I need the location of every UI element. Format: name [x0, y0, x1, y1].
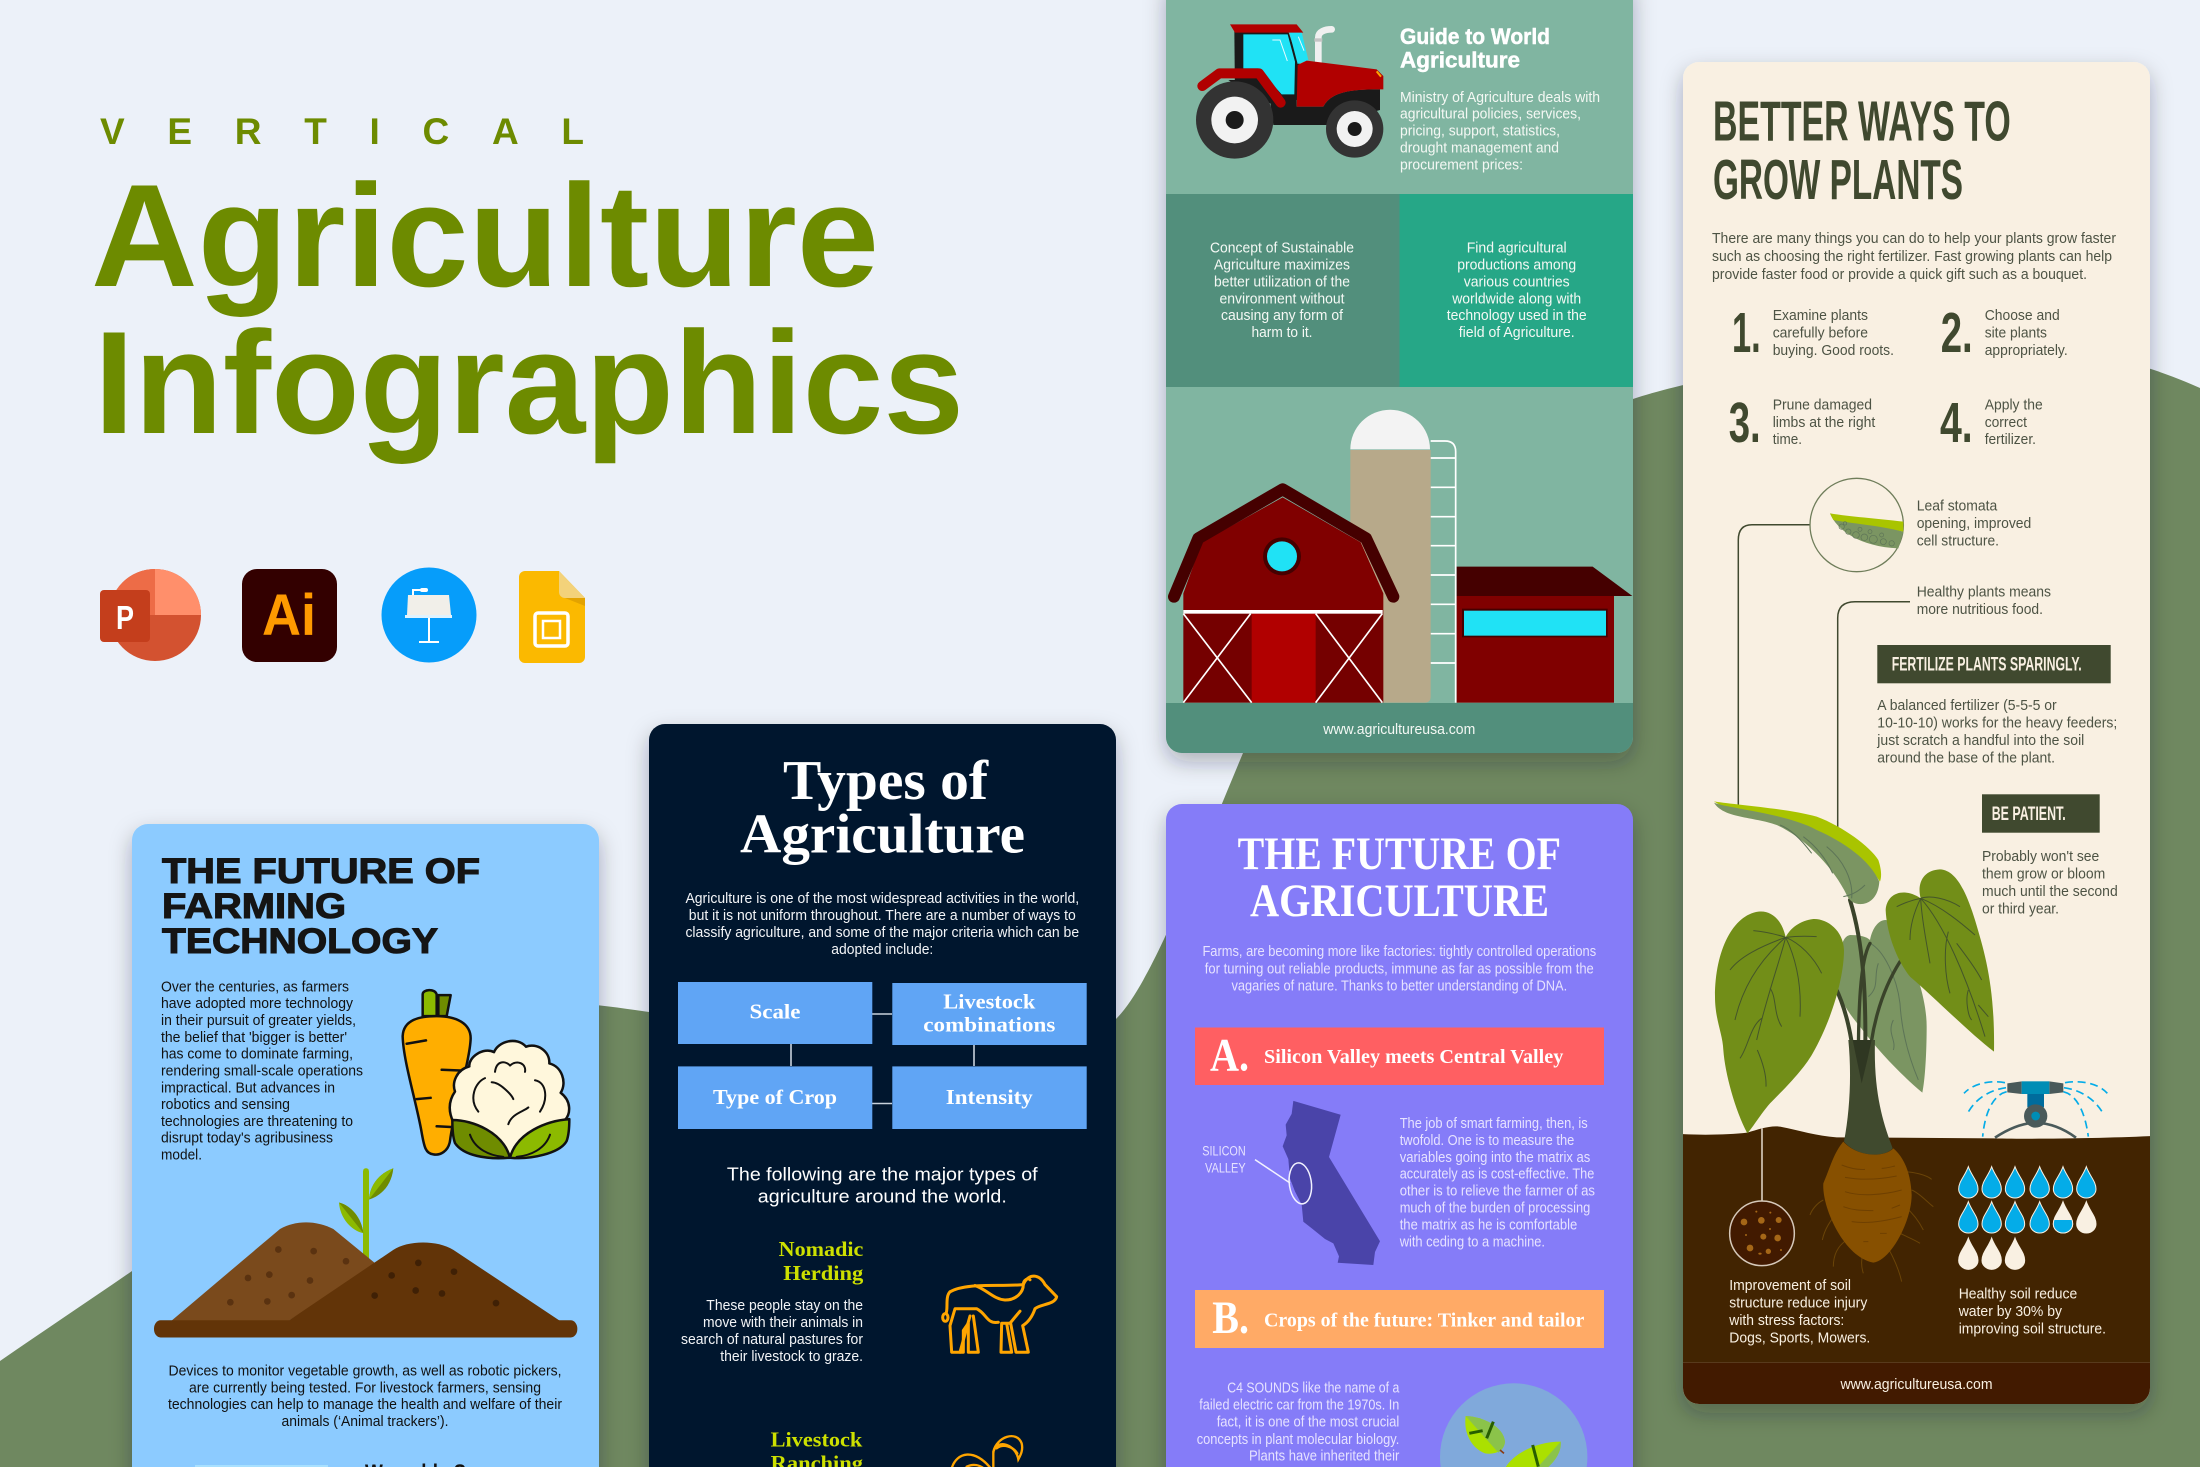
tip 3: time. — [1773, 431, 1802, 448]
intro text — [161, 979, 363, 1164]
heading: Agriculture — [740, 803, 1025, 865]
image placeholder top edge — [195, 1465, 328, 1467]
section B text: C4 SOUNDS like the name of a — [1227, 1381, 1400, 1397]
heading — [740, 750, 1025, 865]
icon: illustrator — [242, 569, 337, 662]
type: nomadic herding: search of natural pastures for — [681, 1332, 863, 1348]
criteria diagram: Livestock — [943, 989, 1036, 1013]
heading: TECHNOLOGY — [162, 922, 438, 961]
block: sustainable agriculture: Agriculture maximizes — [1214, 257, 1350, 273]
panel: better ways to grow plants — [1680, 62, 2153, 1406]
block: sustainable agriculture: Concept of Sustainable — [1210, 240, 1354, 256]
intro text: Ministry of Agriculture deals with — [1400, 90, 1600, 106]
soil note: structure reduce injury — [1729, 1294, 1868, 1311]
fertilizer text: 10-10-10) works for the heavy feeders; — [1877, 714, 2117, 731]
intro text: in their pursuit of greater yields, — [161, 1013, 356, 1029]
intro text: have adopted more technology — [161, 996, 354, 1012]
section A text: other is to relieve the farmer of as — [1400, 1183, 1595, 1199]
lower text: animals (‘Animal trackers’). — [282, 1414, 448, 1430]
tip 4: correct — [1985, 414, 2028, 431]
heading — [1238, 828, 1561, 927]
tip 2 — [1941, 301, 2068, 365]
intro text: robotics and sensing — [161, 1097, 290, 1113]
tip 1: Examine plants — [1773, 307, 1868, 324]
patience text: much until the second — [1982, 883, 2118, 900]
card background — [132, 824, 599, 1467]
section header B — [1195, 1290, 1604, 1348]
heading: agriculture infographics — [91, 154, 964, 464]
card background — [1166, 804, 1633, 1467]
soil note: with stress factors: — [1728, 1312, 1844, 1329]
block: agricultural productions: productions among — [1457, 257, 1576, 273]
section A text: twofold. One is to measure the — [1400, 1133, 1574, 1149]
subheading: agriculture around the world. — [758, 1186, 1007, 1206]
intro text: has come to dominate farming, — [161, 1047, 353, 1063]
intro text: drought management and — [1400, 141, 1559, 157]
tip 2: site plants — [1985, 324, 2047, 341]
section A text: much of the burden of processing — [1400, 1201, 1590, 1217]
intro text: agricultural policies, services, — [1400, 106, 1581, 122]
intro text: impractical. But advances in — [161, 1080, 335, 1096]
section B text: fact, it is one of the most crucial — [1217, 1415, 1399, 1431]
type: nomadic herding: These people stay on the — [706, 1298, 863, 1314]
water note: Healthy soil reduce — [1959, 1286, 2077, 1303]
section A text: The job of smart farming, then, is — [1400, 1116, 1588, 1132]
fertilizer text — [1876, 697, 2117, 767]
tip 4: Apply the — [1985, 396, 2043, 413]
tip 1 — [1732, 301, 1894, 365]
leaf stomata note: Leaf stomata — [1917, 498, 1998, 515]
soil note: Dogs, Sports, Mowers. — [1729, 1329, 1870, 1346]
soil note: Improvement of soil — [1729, 1277, 1851, 1294]
illustration: leaf detail circle — [1810, 478, 1903, 572]
software icons row — [100, 568, 585, 663]
icon: google slides — [519, 571, 585, 663]
icon: powerpoint — [100, 569, 201, 661]
heading: agriculture infographics: Infographics — [94, 301, 964, 464]
illustration: barn and silo — [1174, 410, 1632, 703]
patience text: them grow or bloom — [1982, 865, 2105, 882]
water note: improving soil structure. — [1959, 1321, 2106, 1338]
intro text: for turning out reliable products, immune as far as possible from the — [1205, 962, 1594, 978]
type: livestock ranching — [771, 1428, 864, 1467]
illustration: sprinkler — [1964, 1081, 2107, 1138]
water note: water by 30% by — [1958, 1303, 2062, 1320]
section header A: Silicon Valley meets Central Valley — [1264, 1046, 1564, 1068]
block: agricultural productions: worldwide along with — [1451, 291, 1581, 307]
criteria diagram: Scale — [750, 1000, 800, 1024]
type: nomadic herding — [681, 1237, 864, 1365]
tip 4: 4. — [1940, 391, 1973, 455]
section A text — [1399, 1116, 1595, 1250]
subheading — [727, 1164, 1039, 1206]
illustration: carrot and cauliflower — [403, 990, 569, 1158]
intro text: adopted include: — [831, 942, 933, 958]
intro text: rendering small-scale operations — [161, 1063, 363, 1079]
intro text: There are many things you can do to help your plants grow faster — [1712, 230, 2116, 247]
patience text: or third year. — [1982, 901, 2059, 918]
map: california silicon valley — [1202, 1101, 1380, 1265]
soil ground — [1680, 1126, 2153, 1406]
block: sustainable agriculture: environment without — [1220, 291, 1344, 307]
block: agricultural productions: field of Agriculture. — [1459, 325, 1575, 341]
fertilizer text: A balanced fertilizer (5-5-5 or — [1877, 697, 2057, 714]
tip 1: 1. — [1732, 301, 1761, 365]
icon: powerpoint: P — [116, 599, 134, 636]
heading — [1713, 90, 2011, 212]
heading: Types of — [783, 750, 989, 812]
heading: FARMING — [162, 887, 346, 926]
block: agricultural productions: technology used in the — [1447, 308, 1587, 324]
water drops chart — [1959, 1167, 2096, 1269]
patience text — [1982, 848, 2118, 918]
title block — [91, 111, 964, 464]
label: fertilize plants sparingly: FERTILIZE PLANTS SPARINGLY. — [1892, 654, 2082, 676]
healthy plants note: more nutritious food. — [1917, 601, 2043, 618]
intro text: provide faster food or provide a quick gift such as a bouquet. — [1712, 266, 2087, 283]
heading: BETTER WAYS TO — [1713, 90, 2011, 154]
type: nomadic herding: their livestock to graze. — [720, 1349, 863, 1365]
lower text: Devices to monitor vegetable growth, as well as robotic pickers, — [168, 1364, 562, 1380]
type: nomadic herding: Herding — [783, 1261, 864, 1285]
intro text — [1712, 230, 2116, 283]
label: be patient — [1982, 794, 2100, 833]
green hill background shape — [0, 349, 2200, 1467]
card background — [1683, 62, 2150, 1404]
intro text: disrupt today's agribusiness — [161, 1131, 333, 1147]
block: sustainable agriculture: causing any form of — [1221, 308, 1344, 324]
section B text: Plants have inherited their — [1249, 1449, 1399, 1465]
leaf stomata note — [1917, 498, 2031, 550]
panel: types of agriculture — [649, 724, 1116, 1467]
tip 3: 3. — [1729, 391, 1761, 455]
healthy plants note — [1917, 584, 2051, 618]
illustration: plant leaves — [1714, 801, 1994, 1133]
healthy plants note: Healthy plants means — [1917, 584, 2051, 601]
section A text: variables going into the matrix as — [1400, 1150, 1590, 1166]
heading: THE FUTURE OF — [162, 852, 480, 891]
tip 2: appropriately. — [1985, 342, 2068, 359]
tip 1: buying. Good roots. — [1773, 342, 1894, 359]
lower text — [168, 1364, 562, 1430]
tip 3: Prune damaged — [1773, 396, 1872, 413]
heading: agriculture infographics: Agriculture — [91, 154, 879, 317]
tip 1: carefully before — [1773, 324, 1868, 341]
intro text: model. — [161, 1148, 202, 1164]
intro text: Farms, are becoming more like factories: tightly controlled operations — [1202, 944, 1596, 960]
intro text — [685, 891, 1079, 958]
heading: GROW PLANTS — [1713, 148, 1963, 212]
overline: vertical: VERTICAL — [100, 111, 584, 152]
intro text: Over the centuries, as farmers — [161, 979, 349, 995]
card background — [649, 724, 1116, 1467]
icon: illustrator: Ai — [262, 583, 316, 648]
type: nomadic herding: Nomadic — [779, 1237, 863, 1261]
intro text: but it is not uniform throughout. There are a number of ways to — [689, 908, 1076, 924]
criteria diagram: Type of Crop — [713, 1085, 837, 1109]
criteria diagram — [678, 982, 1087, 1129]
patience text: Probably won't see — [1982, 848, 2099, 865]
callout lines — [1738, 525, 1910, 841]
section A text: with ceding to a machine. — [1399, 1234, 1545, 1250]
card background — [1166, 0, 1633, 753]
water note — [1958, 1286, 2106, 1338]
tip 2: 2. — [1941, 301, 1973, 365]
footer bar — [1166, 703, 1633, 753]
section header A: A. — [1210, 1030, 1249, 1082]
section header B: B. — [1212, 1292, 1249, 1344]
heading: AGRICULTURE — [1250, 875, 1549, 927]
panel: future of agriculture — [1166, 804, 1633, 1467]
section A text: the matrix as he is comfortable — [1400, 1218, 1577, 1234]
type: livestock ranching: Livestock — [771, 1428, 863, 1452]
lower text: technologies can help to manage the health and welfare of their — [168, 1397, 562, 1413]
map: california silicon valley: SILICON — [1202, 1143, 1246, 1158]
block: sustainable agriculture: better utilization of the — [1214, 274, 1350, 290]
icon: rooster — [952, 1436, 1022, 1467]
lower text: are currently being tested. For livestock farmers, sensing — [189, 1380, 541, 1396]
intro text: such as choosing the right fertilizer. Fast growing plants can help — [1712, 248, 2112, 265]
leaf stomata note: cell structure. — [1917, 533, 1999, 550]
section B text: failed electric car from the 1970s. In — [1199, 1397, 1399, 1413]
section B text — [1197, 1381, 1400, 1465]
section A text: accurately as is cost-effective. The — [1400, 1167, 1594, 1183]
block: agricultural productions — [1400, 194, 1633, 387]
tip 2: Choose and — [1985, 307, 2060, 324]
heading: THE FUTURE OF — [1238, 828, 1561, 880]
criteria diagram: Intensity — [946, 1085, 1033, 1109]
tip 4: fertilizer. — [1985, 431, 2036, 448]
intro text: procurement prices: — [1400, 157, 1523, 173]
section B text: concepts in plant molecular biology. — [1197, 1432, 1399, 1448]
panel: future of farming technology — [132, 824, 599, 1467]
heading — [1400, 24, 1550, 73]
illustration: soil sample circle — [1730, 1128, 1794, 1266]
block: agricultural productions: various countries — [1464, 274, 1570, 290]
section header B: Crops of the future: Tinker and tailor — [1264, 1310, 1584, 1332]
intro text: technologies are threatening to — [161, 1114, 353, 1130]
intro text: classify agriculture, and some of the major criteria which can be — [685, 925, 1079, 941]
footer url: www.agricultureusa.com — [1840, 1376, 1992, 1393]
heading: Guide to World — [1400, 24, 1550, 49]
section header A — [1195, 1028, 1604, 1085]
block: sustainable agriculture — [1166, 194, 1400, 387]
tip 4 — [1940, 391, 2043, 455]
intro text: vagaries of nature. Thanks to better understanding of DNA. — [1231, 978, 1567, 994]
leaf stomata note: opening, improved — [1917, 515, 2031, 532]
intro text — [1202, 944, 1596, 994]
type: nomadic herding: move with their animals in — [703, 1315, 863, 1331]
icon: keynote — [382, 568, 476, 662]
heading: Agriculture — [1400, 48, 1520, 73]
block: sustainable agriculture: harm to it. — [1252, 325, 1312, 341]
map: california silicon valley: VALLEY — [1205, 1161, 1246, 1176]
label: be patient: BE PATIENT. — [1992, 803, 2066, 825]
block: agricultural productions: Find agricultural — [1467, 240, 1567, 256]
illustration: soil mounds with sprout — [154, 1168, 577, 1337]
footer bar: www.agricultureusa.com — [1322, 722, 1475, 738]
intro text: Agriculture is one of the most widespread activities in the world, — [685, 891, 1079, 907]
panel: guide to world agriculture — [1166, 0, 1633, 753]
intro text: the belief that 'bigger is better' — [161, 1030, 347, 1046]
label: fertilize plants sparingly — [1877, 645, 2111, 683]
criteria diagram: combinations — [923, 1012, 1055, 1036]
illustration: tractor — [1196, 24, 1383, 159]
icon: cow — [943, 1276, 1057, 1352]
heading — [162, 852, 480, 961]
intro text: pricing, support, statistics, — [1400, 124, 1560, 140]
tip 3 — [1729, 391, 1876, 455]
subheading: The following are the major types of — [727, 1164, 1039, 1185]
fertilizer text: around the base of the plant. — [1877, 750, 2055, 767]
illustration: plant trunk, tuber, roots — [1810, 1040, 1933, 1282]
soil note — [1728, 1277, 1870, 1346]
fertilizer text: just scratch a handful into the soil — [1876, 732, 2084, 749]
tip 3: limbs at the right — [1773, 414, 1876, 431]
illustration: leaves in circle — [1440, 1383, 1587, 1467]
intro text — [1400, 90, 1600, 173]
